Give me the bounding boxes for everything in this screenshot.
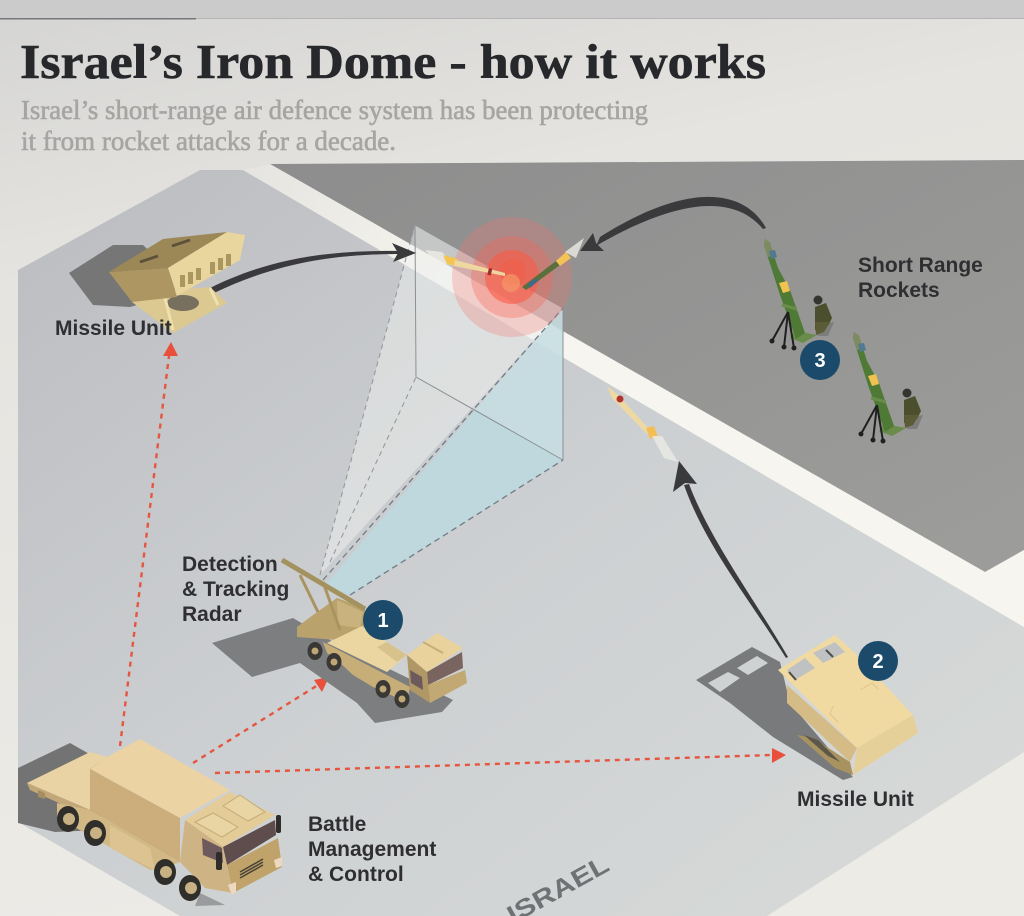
badge 1: 1: [377, 610, 389, 632]
subtitle: Israel’s short-range air defence system has been protecting: [21, 95, 648, 125]
label: short range rockets: Rockets: [858, 279, 940, 302]
data link arrows: [120, 342, 786, 773]
label: missile unit right: Missile Unit: [797, 788, 914, 811]
label: detection radar: Radar: [182, 603, 242, 626]
subtitle: [21, 95, 648, 156]
radar truck: [212, 560, 467, 723]
missile unit right: [696, 635, 918, 780]
subtitle: it from rocket attacks for a decade.: [21, 126, 396, 156]
label: detection radar: Detection: [182, 553, 278, 576]
badge 1: [363, 600, 403, 640]
interceptor missile rising: [607, 386, 678, 462]
battle management truck: [18, 739, 282, 906]
label: battle management: [308, 813, 436, 886]
label: detection radar: & Tracking: [182, 578, 289, 601]
badge 2: 2: [872, 651, 884, 673]
label: short range rockets: Short Range: [858, 254, 983, 277]
badge 3: [800, 340, 840, 380]
interceptor missile: [425, 250, 505, 276]
band between territories: [243, 164, 1024, 627]
badge 2: [858, 641, 898, 681]
label: battle management: Management: [308, 838, 436, 861]
rocket launcher 2: [853, 332, 923, 444]
badge 3: 3: [814, 350, 826, 372]
missile unit top left: [69, 232, 245, 333]
label: battle management: & Control: [308, 863, 404, 886]
arrow: interceptor launch: [673, 461, 788, 658]
rocket launcher 1: [764, 239, 834, 350]
label: battle management: Battle: [308, 813, 366, 836]
label: detection radar: [182, 553, 289, 626]
detection cone: [320, 225, 563, 595]
label: missile unit left: Missile Unit: [55, 317, 172, 340]
incoming rocket: [522, 238, 584, 290]
title: Israel’s Iron Dome - how it works: [20, 34, 766, 89]
arrow: rocket trajectory: [580, 197, 766, 251]
panel: enemy territory: [270, 160, 1024, 572]
arrow: missile unit to interception: [210, 243, 416, 293]
explosion: [452, 217, 572, 337]
label: short range rockets: [858, 254, 983, 302]
